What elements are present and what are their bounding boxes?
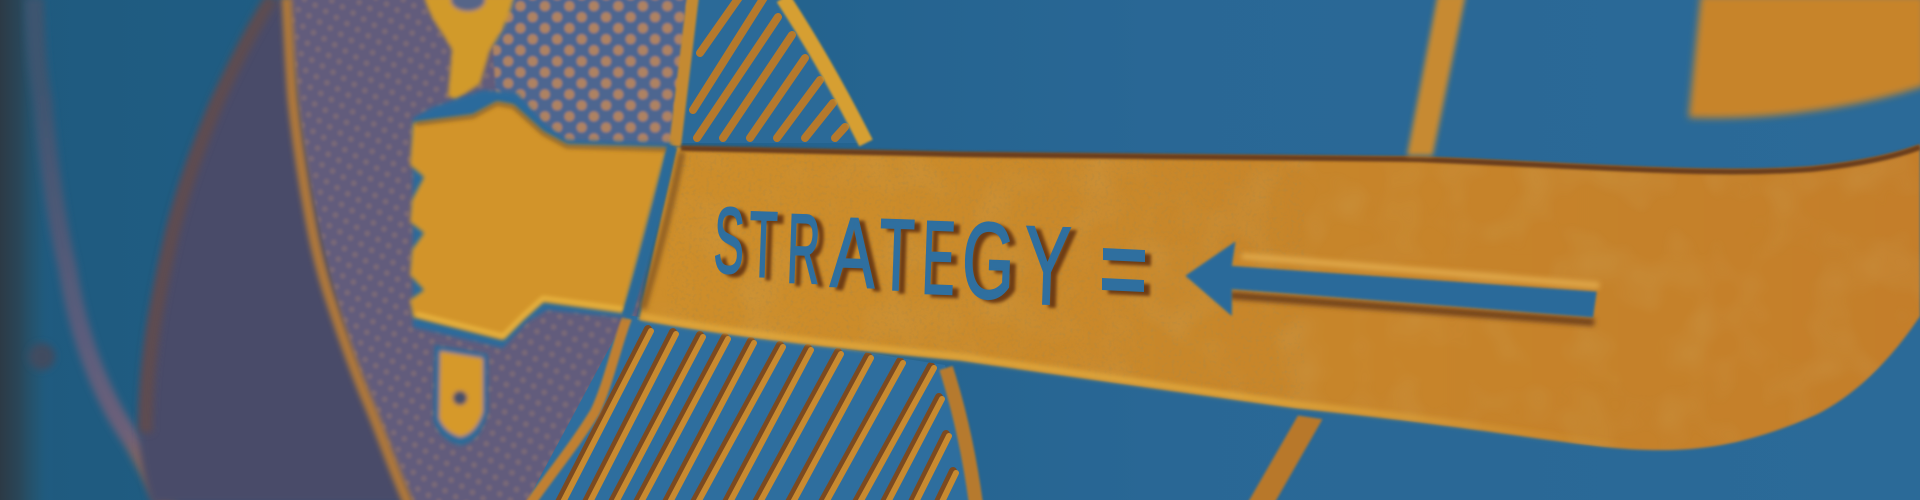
bottom pin xyxy=(436,348,485,443)
strategy bar xyxy=(637,141,1920,460)
lower stripes xyxy=(561,331,956,500)
brown divider shadow xyxy=(643,152,682,309)
bottom pin hole xyxy=(453,391,467,405)
upper radial divider xyxy=(675,0,693,146)
strategy label: Y xyxy=(1022,203,1072,329)
upper line segment xyxy=(1407,0,1466,156)
dotted upper section xyxy=(490,0,693,145)
lower striped wedge xyxy=(520,310,990,500)
hand top shadow xyxy=(416,104,667,150)
strategy label: E xyxy=(920,200,957,317)
small dark spot xyxy=(28,343,55,370)
arrow xyxy=(1185,241,1599,322)
target disc back layers xyxy=(0,0,693,500)
upper stripes xyxy=(693,0,845,138)
strategy label: T xyxy=(877,199,916,312)
strategy label: R xyxy=(785,193,822,304)
lower stripe shadows xyxy=(558,329,953,500)
bar body xyxy=(639,145,1920,450)
bar grain xyxy=(667,145,1304,402)
lower line segment xyxy=(1247,415,1322,500)
top pin xyxy=(424,0,514,100)
lower radial divider xyxy=(530,318,627,500)
bar lower highlight xyxy=(642,316,1641,446)
hand lower highlight xyxy=(416,298,623,336)
dotted disc band xyxy=(289,0,693,500)
hand body xyxy=(410,102,667,340)
disc rim line xyxy=(287,0,409,500)
strategy label xyxy=(712,188,1072,329)
bar mottling xyxy=(637,141,1920,460)
arrow shape xyxy=(1185,241,1597,317)
strategy label: T xyxy=(747,192,779,297)
equals sign xyxy=(1102,248,1145,292)
left dark edge xyxy=(0,0,54,500)
upper striped wedge xyxy=(682,0,856,143)
strategy label: G xyxy=(960,199,1016,322)
strategy label: S xyxy=(712,188,746,293)
hand blue outline xyxy=(413,90,672,348)
top pin hole xyxy=(451,0,485,11)
outer ring xyxy=(34,0,169,500)
upper right orange shape xyxy=(1689,0,1920,118)
bar and foreground shapes xyxy=(627,0,1920,500)
arrow shadow xyxy=(1229,295,1594,322)
arrow highlight xyxy=(1242,256,1599,286)
hand grip xyxy=(410,90,672,348)
bar top shadow xyxy=(681,147,1920,172)
lower wedge arc xyxy=(946,368,976,500)
dark disc segment xyxy=(140,0,422,500)
upper wedge arc xyxy=(783,0,866,143)
blue divider on bar xyxy=(627,147,672,316)
strategy label: A xyxy=(829,196,877,309)
brown arc on disc xyxy=(146,0,272,433)
